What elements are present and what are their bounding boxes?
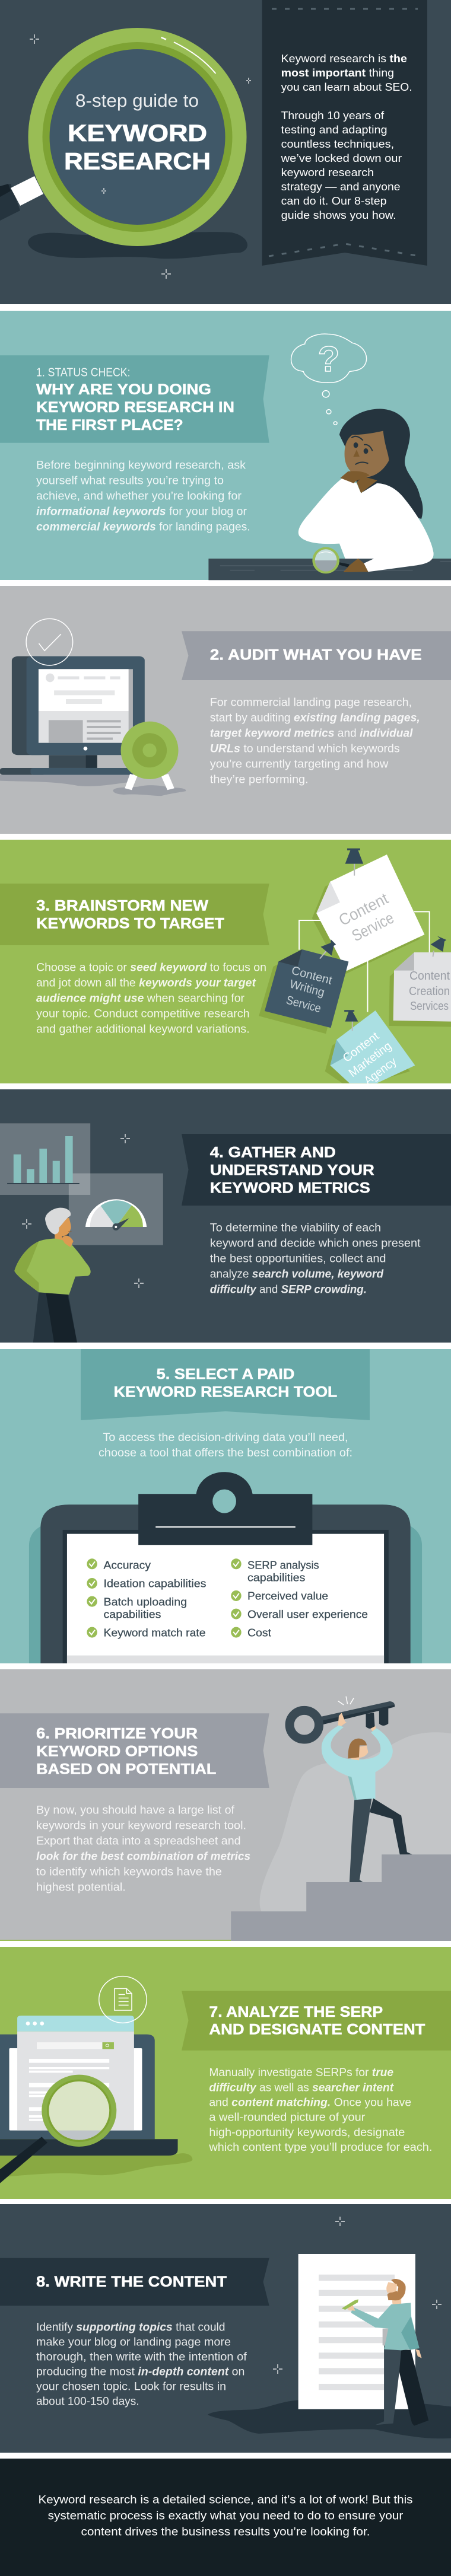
- text: step 7 body: which content type you’ll produce for each.: [208, 2141, 432, 2154]
- intro text: we’ve locked down our: [280, 152, 402, 164]
- text: step 6 body: Export that data into a spreadsheet and: [36, 1835, 241, 1848]
- panel: step 3 brainstorm: [0, 840, 451, 1088]
- text: step 5 body: choose a tool that offers the best combination of:: [99, 1447, 352, 1459]
- banner: step 4: 4. GATHER AND: [210, 1145, 336, 1161]
- banner: step 1: THE FIRST PLACE?: [36, 417, 183, 433]
- text: step 6 body: highest potential.: [36, 1882, 126, 1894]
- text: step 7 body: Manually investigate SERPs for true: [209, 2067, 394, 2079]
- checklist: capabilities: [103, 1609, 161, 1621]
- text: step 2 body: they’re performing.: [210, 774, 309, 786]
- text: step 7 body: difficulty as well as searcher intent: [209, 2081, 394, 2094]
- text: step 6 body: keywords in your keyword research tool.: [36, 1820, 246, 1832]
- panel: conclusion: content drives the business results you’re looking for.: [81, 2525, 370, 2538]
- banner: step 5: [81, 1349, 370, 1420]
- text: step 7 body: [208, 2067, 432, 2154]
- ribbon: intro: [262, 0, 427, 266]
- intro text: Through 10 years of: [281, 110, 385, 122]
- checklist: Overall user experience: [247, 1609, 368, 1621]
- text: step 4 body: keyword and decide which ones present: [210, 1238, 421, 1250]
- text: step 3 body: and gather additional keyword variations.: [36, 1024, 250, 1036]
- illustration: man writing on page: [208, 2254, 451, 2438]
- text: step 7 body: and content matching. Once you have: [209, 2097, 411, 2109]
- banner: step 8: [0, 2258, 269, 2306]
- intro text: most important thing: [281, 67, 394, 79]
- banner: step 5: KEYWORD RESEARCH TOOL: [114, 1385, 337, 1401]
- banner: step 1: KEYWORD RESEARCH IN: [36, 400, 234, 416]
- banner: step 6: BASED ON POTENTIAL: [36, 1762, 216, 1778]
- note labels: [285, 890, 450, 1088]
- panel: conclusion: systematic process is exactly what you need to do to ensure your: [48, 2509, 404, 2522]
- text: step 5 body: To access the decision-driving data you’ll need,: [103, 1432, 348, 1444]
- note labels: Content: [341, 1029, 382, 1065]
- banner: step 1: [0, 355, 269, 443]
- illustration: clipboard: [29, 1472, 422, 1663]
- checklist: Batch uploading: [103, 1596, 187, 1608]
- text: step 1 body: achieve, and whether you’re looking for: [36, 490, 242, 503]
- note labels: Content: [409, 970, 450, 983]
- text: step 3 body: and jot down all the keywords your target: [36, 977, 256, 990]
- intro text: can do it. Our 8-step: [281, 195, 387, 207]
- text: step 5 body: [99, 1432, 352, 1459]
- checklist: Cost: [247, 1627, 271, 1638]
- text: step 6 body: to identify which keywords have the: [36, 1866, 222, 1879]
- panel: step 7 analyze serp: [0, 1947, 451, 2199]
- checklist: Perceived value: [247, 1590, 328, 1602]
- banner: step 7: AND DESIGNATE CONTENT: [209, 2022, 425, 2038]
- text: step 6 body: look for the best combination of metrics: [36, 1851, 250, 1863]
- banner: step 6: 6. PRIORITIZE YOUR: [36, 1726, 198, 1742]
- banner: step 4: [182, 1134, 451, 1206]
- note labels: Writing: [288, 978, 326, 999]
- text: step 1 body: yourself what results you’re trying to: [36, 475, 224, 487]
- panel: hero: [0, 0, 451, 304]
- text: step 2 body: you’re currently targeting and how: [210, 758, 389, 771]
- text: step 4 body: To determine the viability of each: [210, 1222, 381, 1235]
- note labels: Content: [336, 890, 391, 929]
- banner: step 4: KEYWORD METRICS: [210, 1181, 370, 1197]
- text: step 8 body: [36, 2322, 247, 2408]
- intro text: keyword research: [281, 167, 374, 178]
- text: step 8 body: Identify supporting topics that could: [36, 2322, 226, 2334]
- title: KEYWORD: [68, 120, 207, 146]
- text: step 6 body: [36, 1805, 250, 1894]
- banner: step 8: 8. WRITE THE CONTENT: [36, 2274, 227, 2290]
- text: step 1 body: informational keywords for your blog or: [36, 506, 247, 518]
- banner: step 3: 3. BRAINSTORM NEW: [36, 898, 209, 914]
- intro text: [280, 53, 412, 221]
- illustration: magnifying glass: [0, 28, 247, 259]
- intro text: Keyword research is the: [281, 53, 407, 65]
- text: step 6 body: By now, you should have a large list of: [36, 1805, 235, 1817]
- banner: step 3: [0, 884, 269, 945]
- note labels: Service: [285, 994, 322, 1015]
- text: step 8 body: about 100-150 days.: [36, 2396, 139, 2408]
- text: step 7 body: high-opportunity keywords, designate: [209, 2127, 405, 2139]
- icon: question mark: ?: [318, 339, 339, 379]
- text: step 8 body: producing the most in-depth content on: [36, 2366, 244, 2379]
- checklist: Ideation capabilities: [103, 1578, 207, 1590]
- text: step 4 body: [210, 1222, 421, 1296]
- panel: step 1 status check: [0, 311, 451, 580]
- text: step 7 body: a well-rounded picture of your: [209, 2112, 366, 2124]
- text: step 4 body: the best opportunities, collect and: [210, 1253, 386, 1265]
- banner: step 2: [182, 631, 451, 680]
- text: step 2 body: start by auditing existing landing pages,: [210, 712, 420, 725]
- panel: step 5 select tool: [0, 1349, 451, 1663]
- note labels: Agency: [362, 1055, 399, 1088]
- checklist: SERP analysis: [247, 1560, 319, 1571]
- panel: step 6 prioritize: [0, 1669, 451, 1941]
- banner: step 3: KEYWORDS TO TARGET: [36, 916, 224, 932]
- text: step 3 body: audience might use when searching for: [36, 993, 245, 1005]
- panel: step 8 write content: [0, 2204, 451, 2453]
- text: step 1 body: commercial keywords for landing pages.: [36, 521, 250, 534]
- icon: sparkles: [30, 34, 251, 279]
- icon: sparkles: [273, 2217, 442, 2374]
- text: step 4 body: difficulty and SERP crowding.: [210, 1284, 367, 1296]
- text: step 3 body: your topic. Conduct competitive research: [36, 1008, 250, 1021]
- banner: step 5: 5. SELECT A PAID: [157, 1367, 294, 1383]
- banner: step 2: 2. AUDIT WHAT YOU HAVE: [210, 648, 422, 664]
- intro text: strategy — and anyone: [281, 181, 401, 193]
- illustration: monitor and target: [0, 619, 186, 796]
- note labels: Service: [349, 909, 397, 945]
- title: [64, 90, 211, 174]
- text: step 2 body: [210, 697, 420, 786]
- panel: conclusion: Keyword research is a detailed science, and it’s a lot of work! But this: [38, 2494, 413, 2507]
- icon: sparkles: [22, 1134, 144, 1288]
- illustration: person lifting key on stairs: [231, 1697, 451, 1941]
- intro text: guide shows you how.: [281, 209, 396, 221]
- intro text: testing and adapting: [281, 124, 388, 136]
- illustration: pinned notes: [259, 849, 451, 1083]
- text: step 1 body: Before beginning keyword research, ask: [36, 460, 246, 472]
- illustration: thinking woman: [208, 334, 451, 580]
- text: step 2 body: URLs to understand which keywords: [210, 743, 400, 755]
- intro text: you can learn about SEO.: [281, 81, 412, 93]
- banner: step 6: KEYWORD OPTIONS: [36, 1744, 198, 1760]
- checklist: Accuracy: [103, 1560, 151, 1571]
- note labels: Content: [290, 964, 334, 987]
- title: 8-step guide to: [75, 90, 199, 111]
- intro text: countless techniques,: [281, 138, 394, 150]
- banner: step 6: [0, 1713, 269, 1788]
- illustration: analyst with charts: [0, 1123, 163, 1343]
- illustration: laptop with SERP and magnifier: [0, 1976, 192, 2183]
- banner: step 7: 7. ANALYZE THE SERP: [209, 2004, 383, 2020]
- checklist: [103, 1560, 368, 1638]
- text: step 4 body: analyze search volume, keyword: [210, 1268, 383, 1281]
- text: step 3 body: [36, 962, 266, 1036]
- title: RESEARCH: [64, 148, 211, 174]
- banner: step 1: 1. STATUS CHECK:: [36, 366, 131, 379]
- banner: step 7: [182, 1991, 451, 2051]
- text: step 8 body: your chosen topic. Look for results in: [36, 2381, 226, 2393]
- checklist: Keyword match rate: [103, 1627, 205, 1638]
- panel: step 2 audit: [0, 586, 451, 834]
- text: step 8 body: thorough, then write with the intention of: [36, 2351, 247, 2364]
- text: step 2 body: For commercial landing page research,: [210, 697, 412, 709]
- text: step 3 body: Choose a topic or seed keyword to focus on: [36, 962, 266, 974]
- banner: step 4: UNDERSTAND YOUR: [210, 1163, 374, 1179]
- checklist: capabilities: [247, 1572, 305, 1584]
- banner: step 1: WHY ARE YOU DOING: [36, 382, 211, 398]
- text: step 2 body: target keyword metrics and individual: [210, 728, 413, 740]
- text: step 8 body: make your blog or landing page more: [36, 2336, 231, 2349]
- note labels: Marketing: [347, 1040, 394, 1080]
- panel: step 4 metrics: [0, 1089, 451, 1343]
- text: step 1 body: [36, 460, 250, 534]
- panel: conclusion: [0, 2459, 451, 2576]
